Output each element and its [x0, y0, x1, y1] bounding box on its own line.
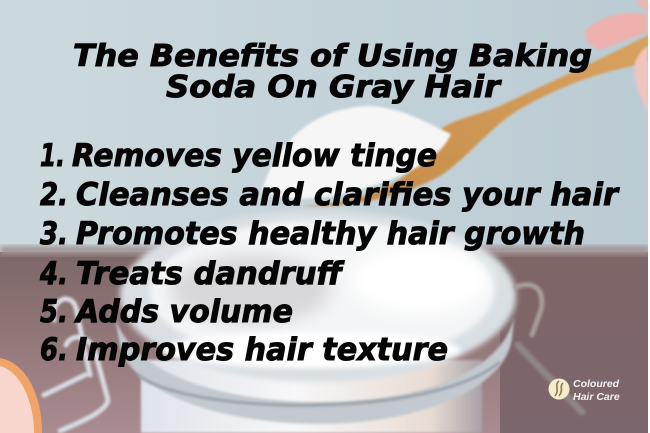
title: [73, 39, 592, 105]
icon: hair logo: [548, 378, 570, 400]
jar metal clasp, right: [516, 285, 582, 412]
logo text: Coloured: [573, 378, 620, 390]
benefits list: 1.: [40, 138, 65, 174]
logo: Coloured Hair Care: [548, 378, 620, 403]
benefits list: 3.: [40, 216, 68, 252]
orange lid, lower left: [0, 358, 42, 433]
benefits list: Improves hair texture: [76, 332, 448, 368]
baking soda heap on spoon: [262, 106, 451, 198]
benefits list: Promotes healthy hair growth: [76, 216, 585, 252]
wooden spoon: [300, 34, 650, 206]
benefits list: 6.: [40, 332, 68, 368]
benefits list: 5.: [40, 294, 68, 330]
benefits list: [39, 138, 620, 368]
benefits list: 2.: [40, 177, 68, 213]
benefits list: Adds volume: [73, 294, 293, 330]
benefits list: Removes yellow tinge: [72, 138, 437, 174]
logo text: [573, 378, 620, 403]
right image edge: [648, 0, 650, 433]
jar metal clasp, left: [44, 299, 108, 431]
fingers holding spoon: [585, 0, 648, 112]
benefits list: Treats dandruff: [76, 256, 345, 292]
benefits list: 4.: [39, 256, 68, 292]
title: The Benefits of Using Baking: [73, 39, 592, 74]
title: Soda On Gray Hair: [166, 70, 502, 105]
benefits list: Cleanses and clarifies your hair: [76, 177, 620, 213]
logo text: Hair Care: [573, 391, 620, 403]
jar of baking soda: [112, 210, 516, 433]
